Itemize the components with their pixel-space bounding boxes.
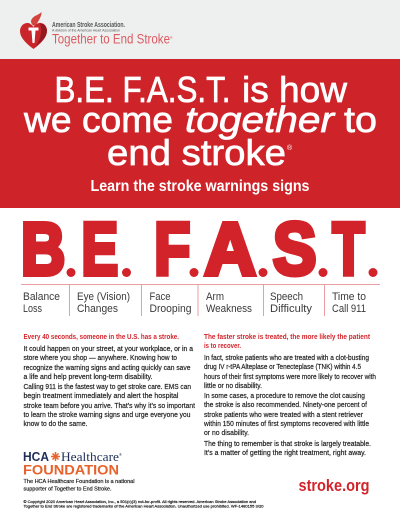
label: time to call 911 (332, 291, 366, 315)
sponsor note: The HCA Healthcare Foundation is a national (24, 479, 134, 485)
logo text: organisation name: ® (170, 36, 173, 40)
logo: HCA Healthcare Foundation (23, 449, 122, 478)
text block: right column: drug IV r-tPA Alteplase or Tenecteplase (TNK) within 4.5 (204, 362, 361, 371)
heading: main title: B.E. F.A.S.T. (54, 69, 230, 110)
heading: B.E. F.A.S.T. large letters: B (21, 208, 65, 290)
logo: HCA Healthcare Foundation: Healthcare (61, 450, 119, 464)
label: time to call 911: Time to (332, 291, 366, 303)
panel: red headline band (0, 59, 400, 208)
label: arm weakness: Weakness (206, 303, 252, 315)
text block: left column: Every 40 seconds, someone in the U.S. has a stroke. (24, 332, 179, 341)
text block: left column: a life and help prevent long-term disability. (24, 372, 152, 381)
text block: right column: little or no disability. (204, 381, 262, 390)
label: balance loss (23, 291, 60, 315)
logo: HCA Healthcare Foundation: FOUNDATION (23, 462, 119, 478)
warning sign labels (23, 291, 366, 315)
logo text: organisation name: Together to End Stroke (52, 32, 170, 46)
text block: left column (24, 332, 196, 428)
copyright notice: Together to End Stroke are registered trademarks of the American Heart Association. Unauthorized use prohibited. WF-1480155 3/20 (24, 504, 264, 508)
heading: B.E. F.A.S.T. large letters: S (273, 208, 316, 290)
label: eye vision changes (77, 291, 130, 315)
heading: B.E. F.A.S.T. large letters: T (332, 208, 364, 290)
sponsor note: supporter of Together to End Stroke. (24, 486, 112, 492)
label: speech difficulty (270, 291, 312, 315)
text block: left column: It could happen on your street, at your workplace, or in a (24, 344, 194, 353)
label: speech difficulty: Difficulty (270, 303, 312, 315)
header band (0, 0, 400, 59)
text block: left column: begin treatment immediately and alert the hospital (24, 391, 179, 400)
logo: HCA Healthcare Foundation: ® (119, 452, 122, 457)
text block: right column (203, 332, 376, 457)
heading: main title: to (344, 99, 377, 140)
logo text: organisation name: American Stroke Association. (52, 20, 125, 29)
label: speech difficulty: Speech (270, 291, 303, 303)
heading: main title (23, 69, 377, 173)
copyright notice: © Copyright 2020 American Heart Association, Inc., a 501(c)(3) not-for-profit. All rights reserved. American Stroke Association and (24, 499, 256, 504)
text block: right column: stroke patients who were treated with a stent retriever (204, 410, 363, 419)
heading: main title: we come (23, 99, 173, 140)
copyright notice (24, 499, 264, 508)
label: time to call 911: Call 911 (332, 303, 366, 315)
logo text: organisation name: A division of the American Heart Association (52, 28, 120, 32)
text block: right column: The thing to remember is that stroke is largely treatable. (204, 439, 371, 448)
logo text: organisation name (52, 20, 173, 46)
text block: left column: recognize the warning signs and acting quickly can save (24, 363, 190, 372)
icon: orange flower mark (51, 452, 60, 461)
heading: B.E. F.A.S.T. large letters: F (154, 208, 190, 290)
text block: right column: the stroke is also recommended. Ninety-one percent of (204, 400, 368, 409)
heading: B.E. F.A.S.T. large letters (21, 208, 378, 290)
icon: heart and torch logo (20, 12, 47, 49)
heading: main title: together (185, 99, 336, 140)
label: face drooping (150, 291, 192, 315)
heading: B.E. F.A.S.T. large letters: E (82, 208, 118, 290)
label: eye vision changes: Changes (77, 303, 118, 315)
text block: left column: store where you shop — anywhere. Knowing how to (24, 353, 177, 362)
sponsor note (24, 479, 134, 492)
text block: right column: In some cases, a procedure to remove the clot causing (204, 391, 365, 400)
heading: main title: is how (242, 69, 348, 110)
label: face drooping: Drooping (150, 303, 192, 315)
text block: right column: The faster stroke is treated, the more likely the patient (204, 332, 370, 341)
logo: HCA Healthcare Foundation: HCA (23, 449, 50, 464)
heading: B.E. F.A.S.T. large letters: A (204, 208, 256, 290)
heading: main title: end stroke (107, 132, 286, 173)
label: face drooping: Face (150, 291, 170, 303)
label: balance loss: Loss (23, 303, 42, 315)
text block: left column: to learn the stroke warning signs and urge everyone you (24, 410, 190, 419)
label: arm weakness: Arm (206, 291, 224, 303)
link: stroke.org: stroke.org (298, 476, 370, 495)
text block: right column: is to recover. (204, 341, 241, 350)
text block: right column: within 150 minutes of first symptoms recovered with little (203, 419, 369, 428)
text block: left column: Calling 911 is the fastest way to get stroke care. EMS can (24, 382, 191, 391)
label: arm weakness (206, 291, 252, 315)
text block: right column: It’s a matter of getting the right treatment, right away. (204, 448, 366, 457)
text block: left column: know to do the same. (24, 419, 88, 428)
text block: right column: In fact, stroke patients who are treated with a clot-busting (204, 353, 369, 362)
text block: left column: stroke team before you arrive. That’s why it’s so important (24, 401, 196, 410)
label: balance loss: Balance (23, 291, 60, 303)
text block: right column: or no disability. (204, 428, 249, 437)
heading: main title: ® (287, 144, 293, 152)
label: eye vision changes: Eye (Vision) (77, 291, 130, 303)
subheading: Learn the stroke warnings signs (90, 178, 310, 195)
